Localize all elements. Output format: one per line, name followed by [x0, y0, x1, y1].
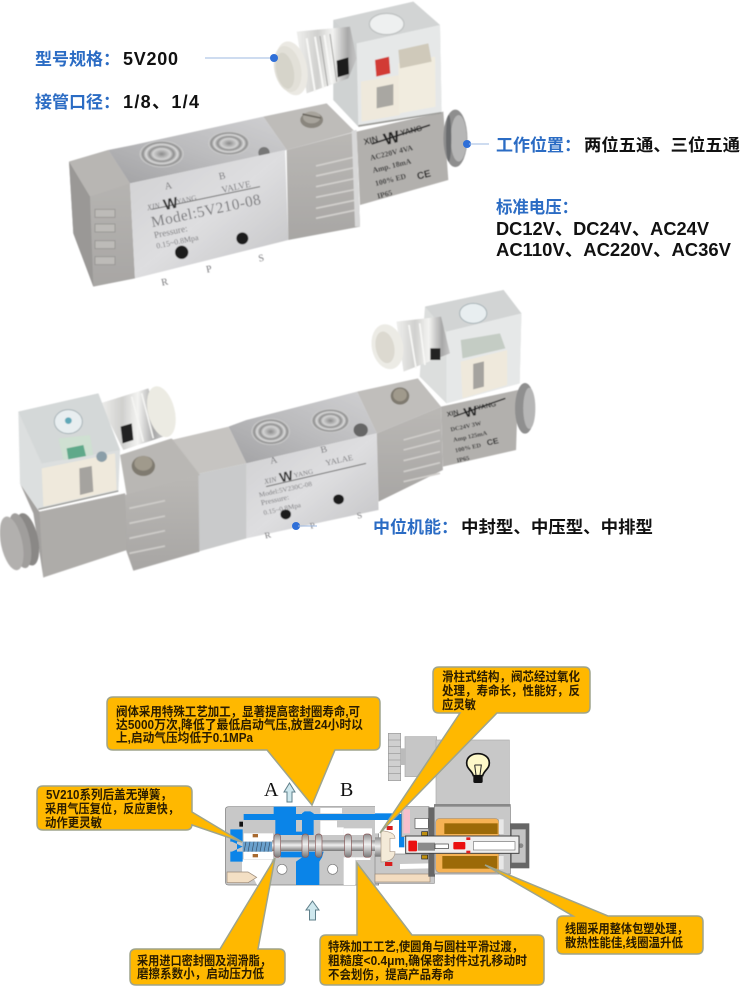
aluminium front nameplate: VALVE	[221, 180, 252, 196]
label: model: 5V200	[123, 49, 178, 69]
blue passages	[230, 807, 384, 885]
label: centre function	[373, 517, 653, 537]
aluminium top with ports	[229, 392, 377, 463]
spool	[272, 840, 382, 851]
left coil and end nut	[0, 483, 127, 577]
aluminium front nameplate: A	[164, 180, 174, 193]
coil box with rating label: AC220V 4VA	[369, 143, 414, 162]
aluminium front nameplate: B	[319, 444, 328, 456]
right coil with label: CE	[486, 435, 500, 447]
callout: no spring rear cover: 采用气压复位，反应更快，	[45, 801, 179, 816]
label: working position: 两位五通、三位五通	[584, 135, 740, 155]
right coil with label	[441, 383, 535, 467]
callout: special machining	[320, 863, 544, 985]
callout: coil encapsulation	[485, 865, 703, 954]
left grey block	[120, 438, 200, 571]
arrow: A port up	[284, 783, 295, 802]
label: centre function: 中封型、中压型、中排型	[461, 518, 653, 537]
coil box with rating label: XIN	[363, 134, 379, 147]
label: standard voltage	[496, 198, 731, 260]
coil box with rating label: W	[382, 127, 402, 149]
label: working position: 工作位置：	[496, 135, 581, 155]
solenoid connector housing	[388, 733, 509, 805]
aluminium front nameplate: Pressure:	[153, 224, 189, 241]
right grey block	[357, 378, 443, 502]
callout: special machining: 特殊加工工艺,使圆角与圆柱平滑过渡，	[328, 939, 523, 954]
label: working position	[496, 135, 740, 155]
cable gland	[270, 27, 357, 98]
solenoid section	[375, 804, 529, 883]
end nut	[443, 110, 467, 167]
port label A: A	[264, 779, 279, 801]
label: standard voltage: DC12V、DC24V、AC24V	[496, 219, 709, 239]
callout: spool structure	[380, 667, 590, 833]
aluminium front nameplate: Model:5V230C-08	[258, 481, 313, 499]
left gland	[100, 383, 181, 450]
right coil with label: Amp 125mA	[452, 430, 488, 444]
callout: no spring rear cover: 动作更灵敏	[45, 815, 102, 830]
left transparent connector	[18, 393, 120, 510]
callout: imported seals: 采用进口密封圈及润滑脂，	[137, 953, 271, 968]
spring	[243, 842, 272, 852]
callout: imported seals: 磨擦系数小，启动压力低	[137, 966, 264, 981]
right coil with label: IP65	[456, 455, 470, 464]
aluminium front nameplate: 0.15~0.8Mpa	[263, 502, 302, 517]
grey block	[263, 103, 360, 240]
transparent connector	[333, 2, 442, 127]
aluminium front nameplate: YANG	[176, 193, 198, 206]
aluminium front nameplate: Pressure:	[260, 493, 290, 507]
callout: imported seals	[130, 858, 285, 985]
aluminium front nameplate: XIN	[262, 475, 278, 486]
right coil with label: XIN	[446, 409, 459, 418]
callout: valve body process: 达5000万次,降低了最低启动气压,放置24小时以	[116, 717, 363, 732]
cross-section diagram	[225, 733, 529, 885]
aluminium front nameplate: YALAE	[325, 453, 354, 468]
label: standard voltage: 标准电压：	[496, 198, 578, 217]
photo: three-position solenoid valve	[0, 290, 535, 577]
aluminium front nameplate: B	[218, 171, 227, 183]
label: centre function: 中位机能：	[373, 517, 458, 537]
aluminium front nameplate: W	[278, 467, 296, 485]
coil box with rating label: Amp. 18mA	[372, 156, 413, 175]
pin	[227, 872, 257, 883]
aluminium front nameplate: S	[356, 510, 363, 521]
label: model: 型号规格：	[35, 50, 120, 69]
aluminium front nameplate: P	[309, 520, 316, 531]
coil box with rating label: 100% ED	[374, 171, 407, 188]
callout: valve body process: 上,启动气压均低于0.1MPa	[116, 730, 254, 745]
label: port size: 1/8、1/4	[123, 92, 199, 112]
leader: working position dot	[463, 140, 489, 148]
callout: coil encapsulation: 线圈采用整体包塑处理，	[565, 921, 688, 936]
mounting screw	[300, 111, 323, 128]
silver spacer	[171, 427, 246, 552]
arrow: P port up	[306, 901, 319, 920]
aluminium top with two ports	[108, 117, 287, 183]
leader: centre function dot	[292, 522, 317, 530]
right coil with label: YANG	[476, 401, 497, 412]
aluminium front nameplate: W	[162, 194, 180, 214]
white cavities	[242, 808, 372, 885]
callout: valve body process	[107, 697, 380, 805]
coil box with rating label: CE	[416, 168, 432, 183]
aluminium front nameplate: R	[160, 276, 169, 289]
callout: special machining: 粗糙度<0.4μm,确保密封件过孔移动时	[328, 953, 527, 968]
aluminium front nameplate	[130, 150, 288, 289]
callout: special machining: 不会划伤，提高产品寿命	[328, 967, 454, 982]
icon: light bulb	[467, 754, 489, 783]
coil box with rating label: IP65	[376, 188, 393, 201]
label: port size	[35, 92, 199, 112]
aluminium front nameplate: Model:5V210-08	[150, 191, 263, 231]
coil box with rating label: YANG	[399, 124, 423, 138]
callout: no spring rear cover	[37, 786, 242, 842]
leader: model dot	[205, 54, 278, 62]
callout: spool structure: 处理，寿命长，性能好，反	[442, 683, 580, 698]
aluminium front nameplate: S	[257, 253, 265, 265]
callout: no spring rear cover: 5V210系列后盖无弹簧，	[46, 787, 172, 802]
aluminium front nameplate: XIN	[145, 201, 161, 213]
label: port size: 接管口径：	[35, 92, 120, 112]
right coil with label: 100% ED	[454, 442, 482, 454]
callout: spool structure: 应灵敏	[442, 697, 476, 712]
aluminium front nameplate: 0.15~0.8Mpa	[155, 233, 200, 251]
photo: two-position solenoid valve	[69, 2, 467, 289]
port label B: B	[340, 779, 353, 801]
aluminium front nameplate: A	[269, 455, 278, 467]
callout: spool structure: 滑柱式结构，阀芯经过氧化	[442, 669, 580, 684]
callout: valve body process: 阀体采用特殊工艺加工，显著提高密封圈寿命,可	[116, 704, 360, 719]
aluminium front nameplate: YANG	[293, 469, 314, 480]
right coil with label: W	[462, 402, 480, 420]
spool end hub	[375, 837, 382, 857]
aluminium front nameplate: R	[264, 530, 272, 540]
right coil with label: DC24V 3W	[450, 420, 483, 433]
aluminium front nameplate	[246, 433, 379, 540]
right transparent connector and gland	[368, 290, 521, 403]
aluminium front nameplate: P	[205, 264, 213, 276]
valve body section	[225, 807, 384, 885]
valve end cap	[69, 150, 135, 287]
label: model	[35, 49, 178, 69]
coil box with rating label	[357, 112, 448, 205]
label: standard voltage: AC110V、AC220V、AC36V	[496, 240, 731, 260]
callout: coil encapsulation: 散热性能佳,线圈温升低	[565, 935, 683, 950]
